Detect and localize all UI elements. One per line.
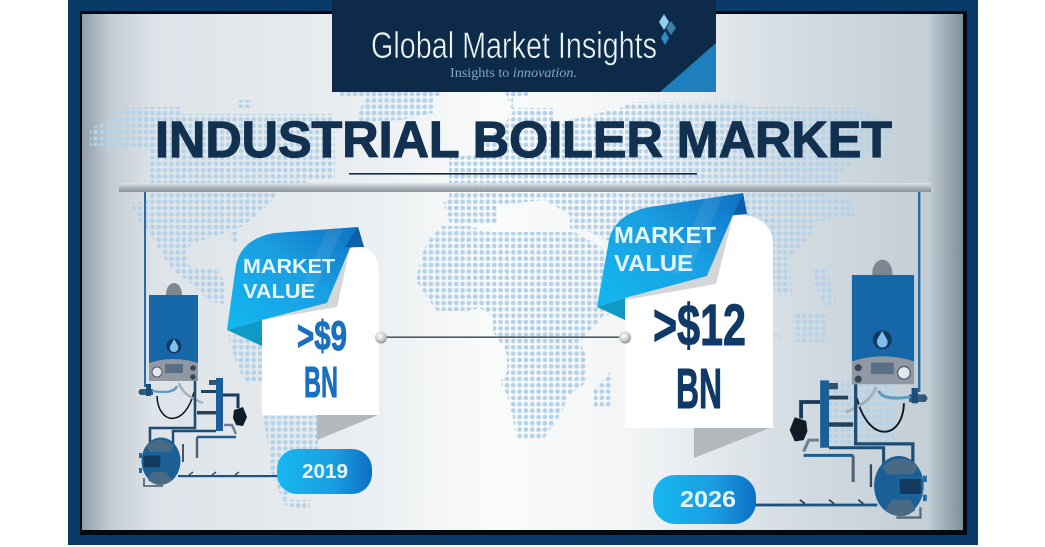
logo diamonds	[659, 14, 676, 45]
hoses	[150, 381, 238, 462]
left value card	[262, 247, 379, 415]
left ribbon	[227, 227, 364, 346]
connector line between values	[375, 332, 631, 344]
manifold	[197, 378, 223, 431]
tank	[139, 438, 180, 486]
pump	[233, 407, 247, 426]
ribbon fold dark	[227, 320, 262, 346]
right ribbon	[597, 193, 747, 320]
right value card	[625, 215, 773, 428]
logo corner triangle	[660, 43, 716, 92]
title underline	[349, 173, 697, 175]
background panel	[82, 14, 963, 530]
right card fold	[694, 428, 770, 458]
left value: BN	[304, 358, 338, 407]
right supply pipe	[918, 192, 920, 392]
valve	[138, 384, 153, 396]
title: INDUSTRIAL BOILER MARKET	[155, 111, 892, 168]
dotted world map	[85, 88, 905, 518]
ribbon stripes	[672, 196, 723, 275]
right paper shadow	[625, 215, 733, 300]
left year pill: 2019	[302, 461, 348, 483]
left value: >$9	[297, 312, 347, 359]
right value: BN	[676, 357, 722, 421]
ribbon fold dark	[597, 298, 625, 320]
left boiler system	[138, 283, 278, 486]
right year pill	[653, 475, 756, 524]
right boiler system	[750, 260, 927, 518]
market value label: MARKET	[614, 222, 716, 248]
base pipe	[178, 472, 278, 477]
control panel	[149, 359, 198, 381]
right value: >$12	[653, 293, 746, 358]
logo banner	[332, 0, 716, 92]
shelf bar	[119, 183, 931, 192]
left supply pipe	[144, 192, 146, 387]
market value label: VALUE	[243, 280, 315, 303]
left paper shadow	[262, 248, 350, 320]
boiler body	[149, 295, 198, 363]
right year pill: 2026	[680, 486, 736, 512]
left year pill	[277, 449, 372, 494]
left value	[297, 312, 347, 407]
logo tagline: Insights to innovation.	[450, 65, 577, 80]
ribbon stripes	[298, 229, 343, 295]
market value label: VALUE	[614, 250, 693, 276]
logo wordmark: Global Market Insights	[371, 25, 657, 66]
flame badge	[166, 338, 182, 354]
left card fold	[317, 415, 378, 440]
right value	[653, 293, 746, 421]
market value label: MARKET	[243, 255, 335, 278]
boiler cap	[166, 283, 182, 295]
